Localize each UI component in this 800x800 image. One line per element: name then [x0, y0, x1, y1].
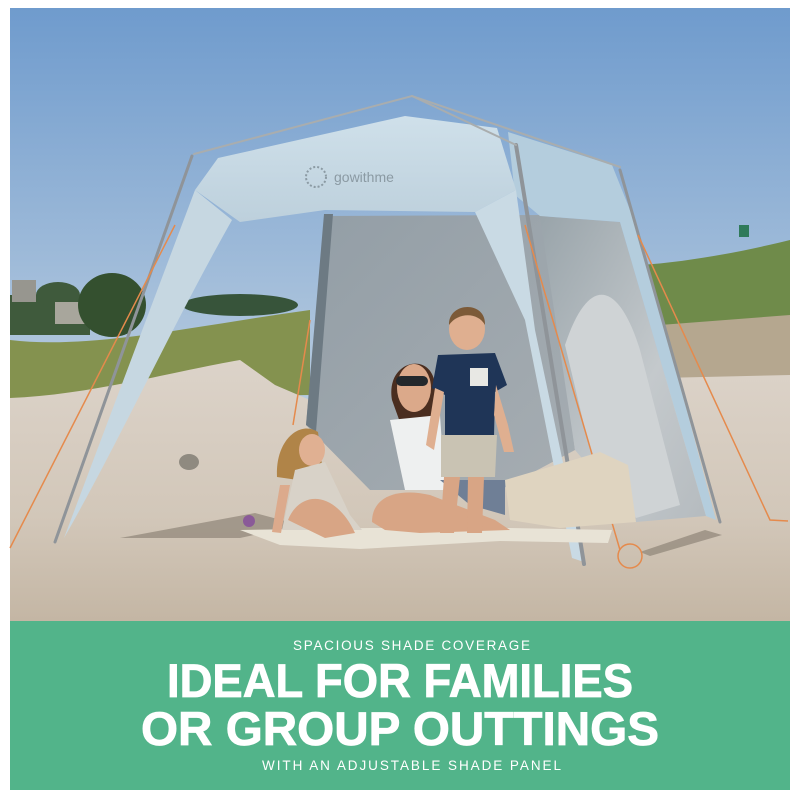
logo sun [306, 167, 326, 187]
banner background [10, 621, 790, 790]
front roof [195, 116, 516, 222]
tent [10, 96, 788, 568]
beach bag [505, 452, 636, 528]
beach sand [10, 360, 790, 621]
photo: beach scene [10, 8, 790, 621]
purple toy [243, 515, 255, 527]
guy lines [10, 225, 788, 568]
sand shadow [120, 513, 300, 538]
brand logo text: gowithme [334, 169, 394, 185]
left door strip [306, 214, 333, 432]
distant trees and houses [10, 273, 298, 337]
flag [739, 225, 749, 237]
right dune grass [640, 240, 790, 325]
right side panel [540, 216, 706, 522]
panel highlight [565, 295, 680, 518]
beach blanket [240, 528, 612, 549]
distant bird on sand [179, 454, 199, 470]
subtext: WITH AN ADJUSTABLE SHADE PANEL [262, 758, 561, 773]
right outer wall [508, 132, 716, 520]
heading line 2: OR GROUP OUTTINGS [141, 702, 659, 755]
caption banner [10, 621, 790, 790]
boy [426, 307, 514, 533]
back wall [306, 215, 575, 490]
poles [55, 96, 720, 564]
heading line 1: IDEAL FOR FAMILIES [167, 654, 633, 707]
sky [10, 8, 790, 408]
left leg [64, 190, 232, 538]
right dune sand [660, 315, 790, 385]
brand logo text [306, 167, 394, 187]
left dune grass [10, 310, 310, 400]
right leg [475, 190, 584, 562]
girl [272, 429, 362, 538]
kicker text: SPACIOUS SHADE COVERAGE [293, 638, 530, 653]
woman [372, 364, 510, 533]
